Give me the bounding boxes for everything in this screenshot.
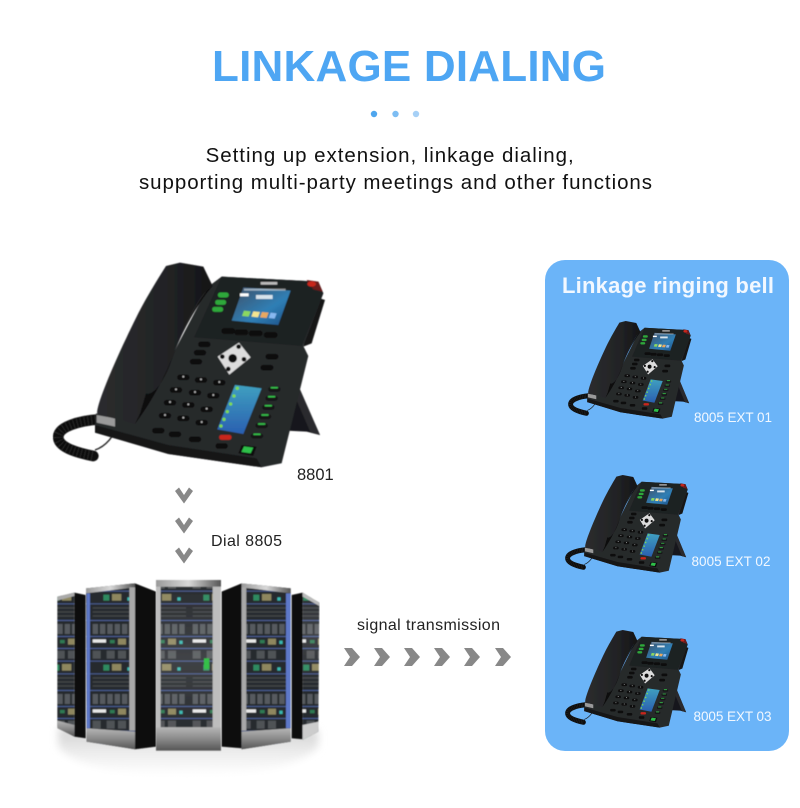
down arrows [175,488,193,564]
main phone 8801 [58,263,325,467]
phone ext 03 [568,630,688,728]
rack 4 [222,583,291,749]
panel: linkage ringing bell [545,260,789,751]
label dial: Dial 8805 [211,533,282,550]
rack 5 [292,593,319,740]
label ext 03: 8005 EXT 03 [694,709,772,724]
server racks [57,580,319,775]
label 8801: 8801 [297,466,334,484]
reflection [58,728,318,775]
label ext 02: 8005 EXT 02 [692,554,770,569]
rack 2 [86,583,156,749]
rack 3 [156,580,221,751]
subtitle: Setting up extension, linkage dialing, [206,144,574,167]
subtitle: supporting multi-party meetings and other functions [139,171,652,194]
title dots [371,111,419,117]
right arrows [344,648,511,666]
rack 1 [57,593,86,738]
phone ext 02 [568,475,688,573]
panel heading: Linkage ringing bell [562,273,774,298]
label signal: signal transmission [357,617,500,634]
label ext 01: 8005 EXT 01 [694,410,772,425]
phone ext 01 [571,321,691,419]
title: LINKAGE DIALING [212,42,606,91]
